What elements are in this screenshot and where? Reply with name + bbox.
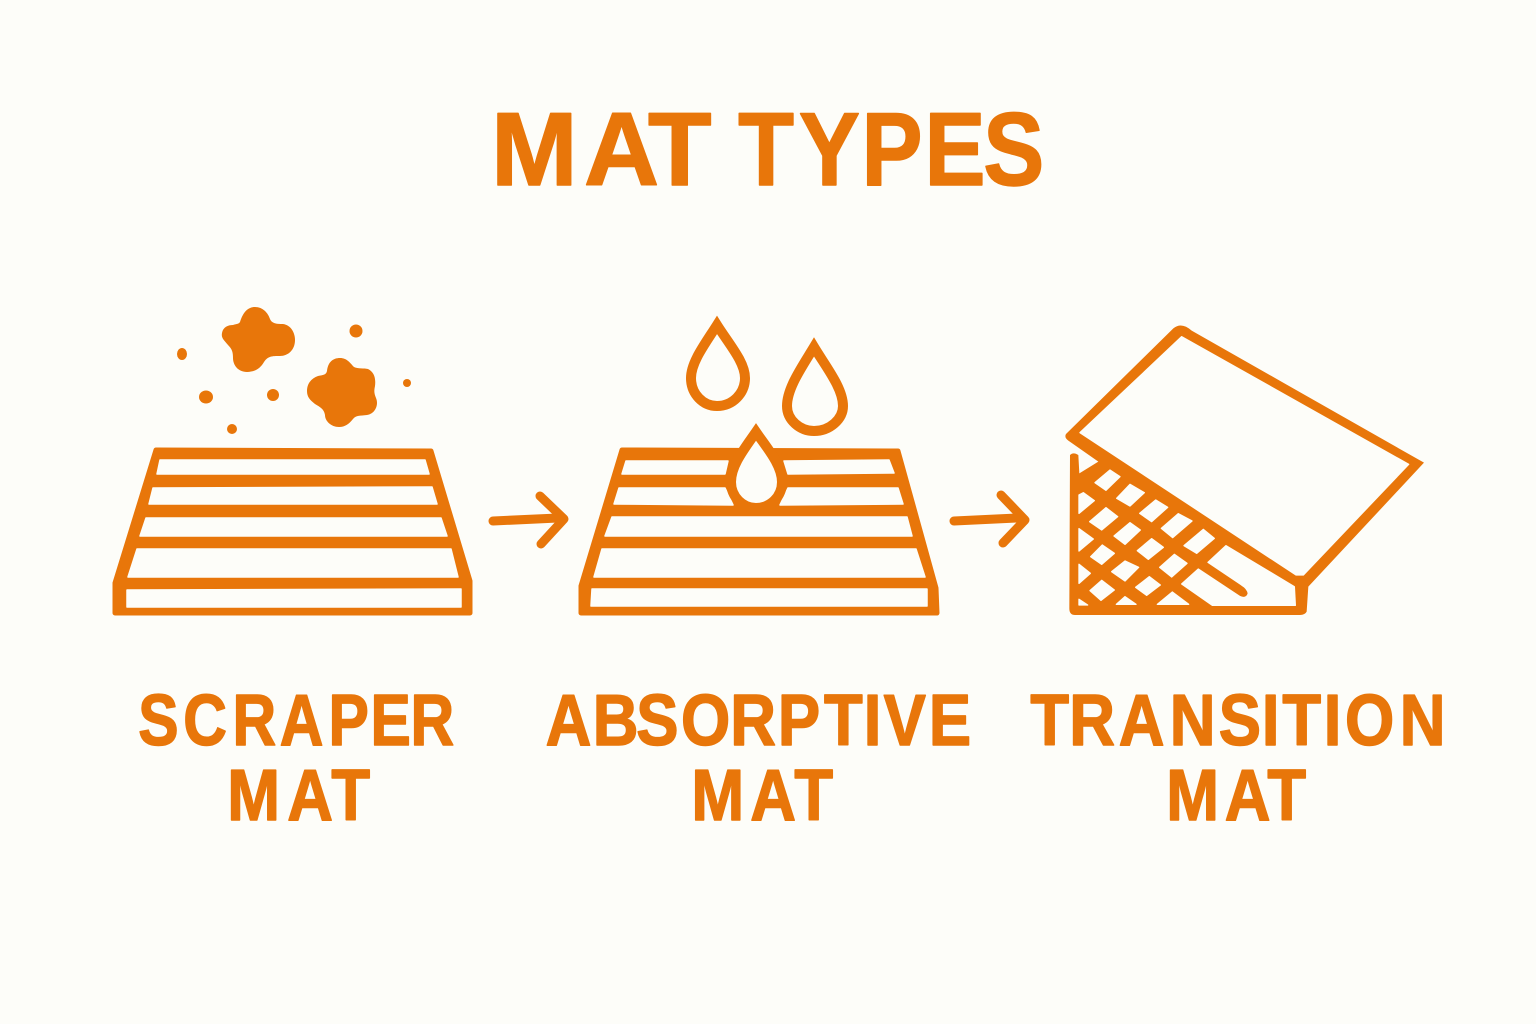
icon: striped absorptive mat [581, 450, 937, 613]
label: scraper mat: MAT [227, 756, 370, 836]
title: TYPES [738, 91, 1044, 207]
label: absorptive mat: MAT [691, 756, 833, 836]
title [491, 91, 1044, 208]
title: MAT [491, 92, 712, 208]
icon: water drops [691, 325, 843, 508]
label: absorptive mat: ABSORPTIVE [546, 681, 971, 761]
panel: absorptive mat [546, 325, 971, 836]
icon: transition mat with ramp [1065, 325, 1424, 615]
label: transition mat: TRANSITION [1030, 681, 1446, 761]
icon: dirt particles [177, 307, 411, 434]
label: scraper mat [138, 681, 454, 836]
panel: scraper mat [115, 307, 470, 836]
label: transition mat: MAT [1166, 756, 1306, 836]
arrow: scraper to absorptive [493, 496, 564, 544]
arrow: absorptive to transition [954, 495, 1025, 543]
label: scraper mat: SCRAPER [138, 681, 454, 761]
label: transition mat [1030, 681, 1446, 836]
panel: transition mat [1030, 325, 1446, 836]
icon: striped scraper mat [115, 450, 470, 613]
label: absorptive mat [546, 681, 971, 836]
